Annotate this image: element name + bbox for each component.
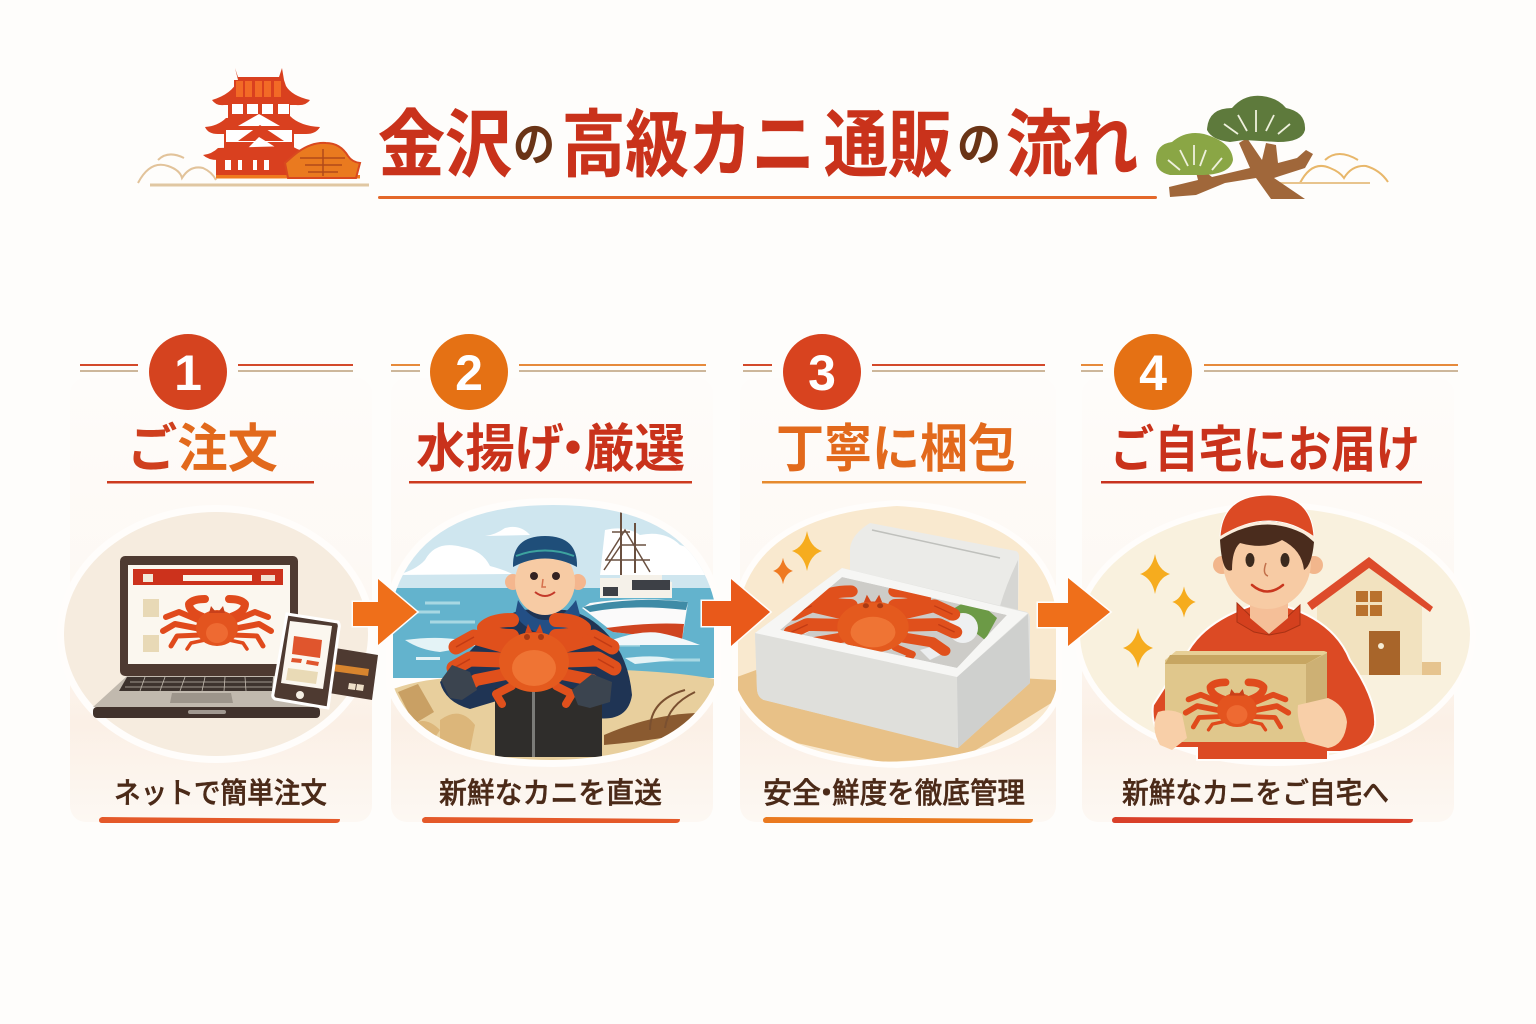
step number 2: 2	[455, 345, 483, 401]
heading 2: 厳選	[584, 421, 685, 479]
delivery person	[1153, 495, 1375, 760]
clouds	[397, 527, 714, 575]
step number 4	[1081, 334, 1458, 410]
icon: smartphone	[273, 614, 339, 708]
title: 金沢	[378, 105, 512, 186]
step number 3: 3	[808, 345, 836, 401]
title	[378, 105, 1138, 186]
step number 1	[80, 334, 353, 410]
infographic canvas	[64, 68, 1470, 823]
arrow 2	[702, 579, 770, 646]
heading 4: ご自宅にお届け	[1110, 422, 1420, 478]
step number 1: 1	[174, 345, 202, 401]
title: 通販	[824, 105, 952, 186]
heading 2: ・	[547, 421, 599, 479]
caption 4	[1112, 777, 1413, 823]
gloves	[441, 665, 477, 700]
parcel with crab	[1165, 651, 1327, 742]
step number 4: 4	[1139, 345, 1167, 401]
sparkles	[792, 531, 822, 571]
icon: laptop	[93, 556, 320, 718]
caption 1	[99, 777, 340, 823]
sky	[390, 500, 720, 590]
title: の	[513, 118, 555, 171]
icon: credit card	[329, 648, 378, 700]
fisherman	[440, 536, 632, 757]
illustration: home delivery	[1074, 495, 1476, 766]
caption 3	[763, 777, 1033, 823]
caption 3: ・	[812, 778, 841, 810]
illustration: fisherman with crab	[390, 500, 720, 770]
illustration: ordering online	[57, 505, 378, 763]
caption 2	[422, 777, 680, 823]
icon: house	[1307, 557, 1441, 675]
caption 3: 安全	[763, 777, 821, 810]
step 3 panel	[735, 334, 1060, 823]
heading 1: ご注文	[127, 421, 278, 479]
arrow 1	[353, 579, 417, 645]
sand and rocks	[394, 670, 714, 760]
icon: open box	[755, 568, 1030, 748]
panel background 2	[391, 378, 713, 822]
illustration: styrofoam box packing	[735, 500, 1060, 770]
heading 3: 丁寧に梱包	[776, 421, 1016, 479]
shiso leaf	[954, 604, 997, 640]
ship	[582, 505, 700, 645]
sparkles	[1140, 554, 1170, 594]
title underline	[378, 196, 1157, 199]
icon: pine tree	[1156, 96, 1388, 199]
caption 3: 鮮度を徹底管理	[832, 777, 1025, 810]
title: 高級カニ	[562, 105, 815, 186]
caption 4: 新鮮なカニをご自宅へ	[1122, 777, 1389, 810]
hands	[1154, 698, 1347, 750]
step number 2	[391, 334, 706, 410]
caption 2: 新鮮なカニを直送	[439, 777, 662, 810]
heading 2	[409, 421, 692, 484]
step 2 panel	[390, 334, 720, 823]
crab in hands	[454, 620, 614, 704]
sea	[390, 588, 720, 678]
heading 2: 水揚げ	[416, 421, 564, 479]
panel background 3	[740, 378, 1056, 822]
step 4 panel	[1074, 334, 1476, 823]
ice	[948, 613, 978, 643]
icon: lid	[850, 523, 1019, 610]
step 1 panel	[57, 334, 378, 823]
caption 1: ネットで簡単注文	[114, 777, 327, 810]
header	[138, 68, 1388, 199]
crab in box	[791, 591, 955, 663]
panel background 4	[1082, 378, 1454, 822]
title: の	[957, 118, 1001, 171]
panel background 1	[70, 378, 372, 822]
icon: Kanazawa castle	[138, 68, 369, 186]
step number 3	[743, 334, 1045, 410]
title: 流れ	[1006, 105, 1138, 186]
arrow 3	[1038, 578, 1110, 646]
